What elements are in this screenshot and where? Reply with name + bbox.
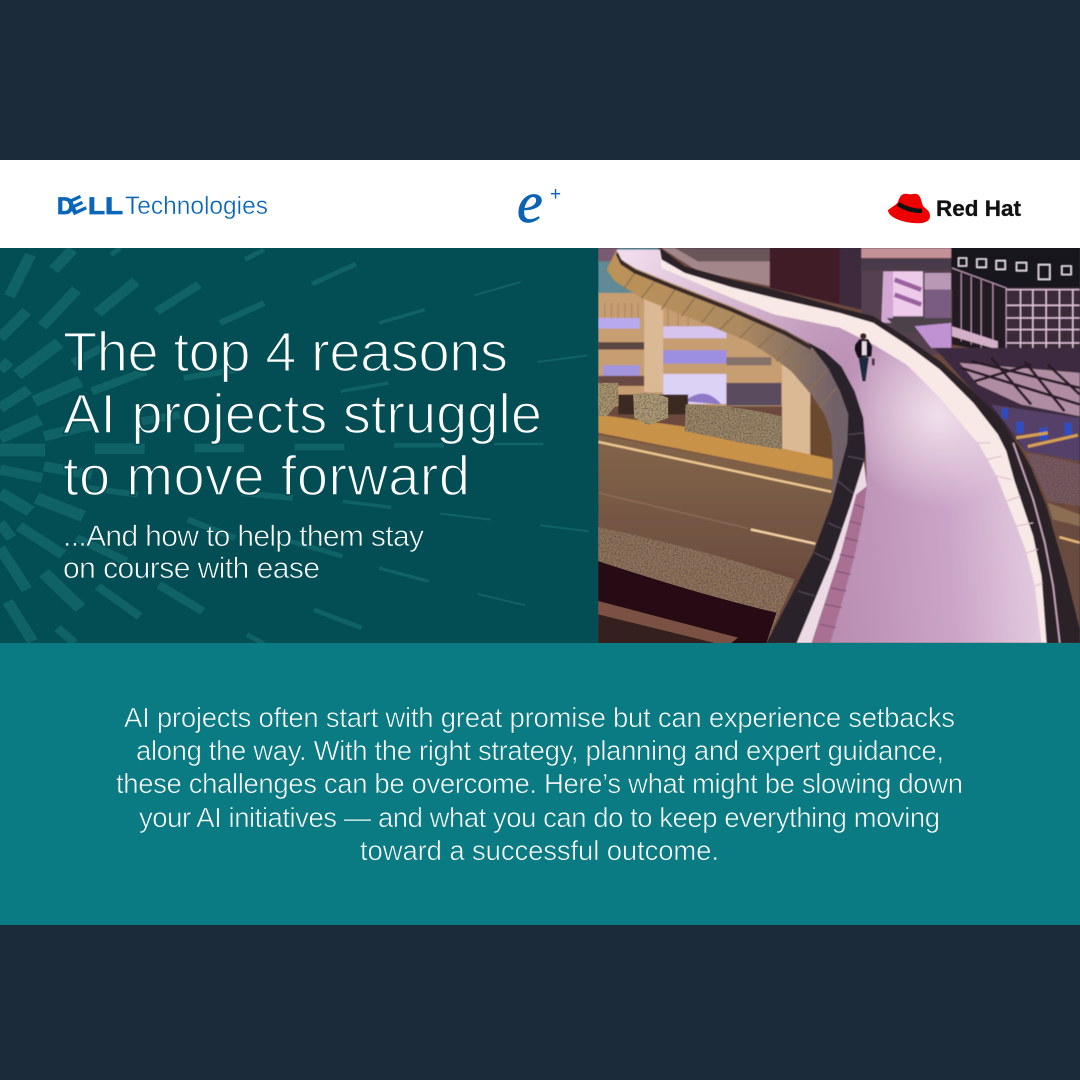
heading: The top 4 reasons (63, 320, 508, 383)
underside ribs (623, 273, 836, 408)
top-left sky gap (598, 248, 658, 295)
bridge structure (607, 248, 1080, 643)
lower kerb (598, 601, 738, 643)
body paragraph: your AI initiatives — and what you can do to keep everything moving (139, 802, 940, 833)
logo: Red Hat: Red Hat (936, 196, 1022, 221)
right verge and road (1046, 501, 1080, 643)
body paragraph: AI projects often start with great promise but can experience setbacks (124, 702, 955, 733)
logo: e plus: + (550, 184, 561, 205)
logo: Dell Technologies: L (105, 193, 123, 220)
heading: AI projects struggle (63, 382, 542, 445)
kerb blocks (812, 486, 867, 643)
underside panels (607, 250, 848, 503)
lit edge strip and tiles (660, 250, 1046, 643)
outer parapet (660, 248, 1080, 643)
photo: curved pedestrian bridge at dusk (598, 248, 1080, 643)
parapet light line (1013, 443, 1060, 643)
dark hedge base (598, 561, 776, 643)
far side: dark vines (770, 248, 861, 310)
logo: Dell Technologies: L (88, 193, 105, 220)
logo: Dell Technologies: D (57, 193, 74, 220)
heading: to move forward (63, 444, 470, 507)
ray pattern background (0, 248, 589, 644)
body paragraph: toward a successful outcome. (360, 835, 719, 866)
deck glow (617, 250, 1046, 643)
subheading: ...And how to help them stay (63, 520, 424, 553)
light upper deck (617, 250, 865, 366)
panel: intro text band (0, 643, 1080, 925)
pedestrian (855, 333, 875, 381)
dark stone band (767, 338, 866, 643)
body paragraph: these challenges can be overcome. Here’s what might be slowing down (116, 768, 963, 799)
far side: canopy and plaza (935, 348, 1080, 461)
garage structure (598, 293, 785, 406)
walkway deck (617, 250, 1046, 643)
scene background (598, 248, 1080, 643)
far side: office building (951, 248, 1080, 290)
subheading: on course with ease (63, 552, 320, 585)
hedges (598, 383, 1080, 643)
white kerb strip (797, 461, 867, 643)
body paragraph: along the way. With the right strategy, planning and expert guidance, (136, 735, 944, 766)
verge and road (598, 415, 833, 479)
dark lip under deck (618, 253, 811, 348)
panel: logo header bar (0, 160, 1080, 248)
logo: Red Hat (888, 194, 1022, 224)
far side: car park block (861, 248, 951, 355)
logo: Dell Technologies (57, 190, 268, 220)
body paragraph (116, 702, 963, 866)
logo: Dell Technologies: Technologies (125, 192, 268, 220)
heading (63, 320, 542, 507)
far side: pink wall above the bridge (661, 248, 771, 286)
logo: e plus (517, 180, 561, 230)
panel: title with ray pattern (0, 248, 599, 643)
logo: Dell Technologies: E (64, 190, 89, 220)
subheading (63, 520, 424, 585)
stone joints (798, 433, 864, 596)
